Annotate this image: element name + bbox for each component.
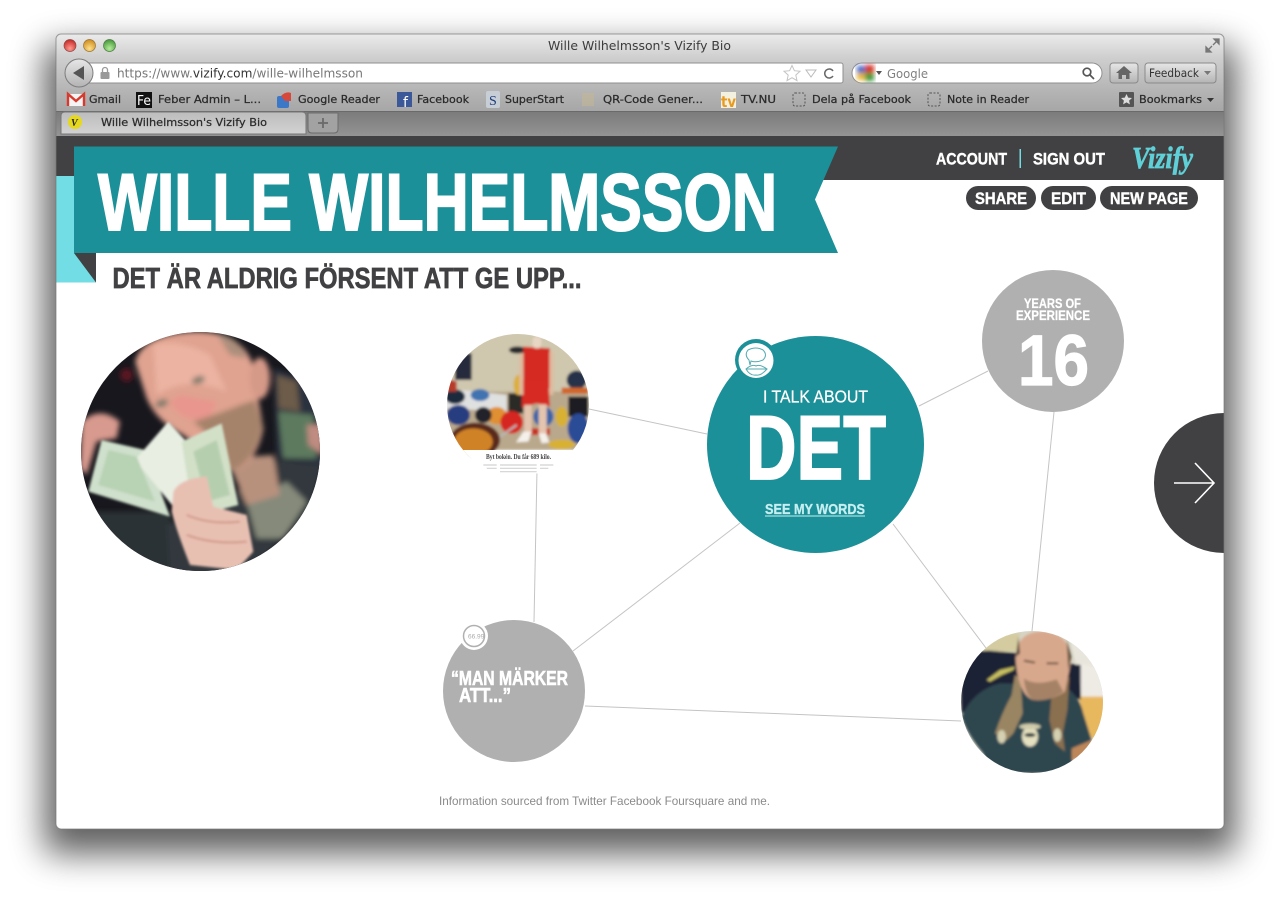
browser chrome	[56, 34, 1224, 136]
action buttons	[966, 186, 1198, 210]
bookmarks bar	[66, 91, 1214, 108]
icon: arrow	[1174, 463, 1214, 503]
account nav	[936, 149, 1106, 168]
icon: magnifier	[1083, 68, 1094, 79]
home button	[1110, 63, 1138, 83]
icon: superstart	[486, 91, 500, 109]
icon: star	[784, 66, 800, 81]
title ribbon accent	[56, 176, 96, 282]
back button	[65, 59, 93, 87]
icon: quote marks: 66.99	[468, 634, 485, 640]
title: WILLE WILHELMSSON	[98, 158, 777, 248]
icon: facebook: f	[403, 95, 409, 111]
topic bubble: DET: DET	[746, 398, 886, 499]
bookmarks bar: Bookmarks	[1139, 93, 1202, 106]
bookmarks bar: TV.NU	[740, 93, 776, 106]
stat bubble: years of experience: YEARS OF	[1024, 296, 1081, 311]
photo caption: Byt bokén. Du får 689 kilo.	[486, 452, 551, 461]
icon: dropdown triangle	[806, 70, 816, 77]
weightlifting photo	[445, 332, 593, 483]
window outline	[56, 34, 1224, 829]
quote bubble	[443, 620, 585, 762]
icon: facebook	[397, 92, 412, 107]
icon: tv.nu: tv	[721, 93, 736, 111]
link: see my words: SEE MY WORDS	[765, 502, 865, 518]
bearded man photo	[960, 630, 1107, 775]
feedback button: Feedback	[1149, 66, 1199, 80]
title ribbon	[74, 146, 838, 253]
address bar: https://www.vizify.com/wille-wilhelmsson	[117, 66, 363, 80]
account nav: ACCOUNT	[936, 150, 1008, 168]
icon: fullscreen arrows	[1206, 39, 1219, 52]
profile photo	[70, 330, 323, 578]
action buttons: EDIT	[1051, 189, 1087, 208]
icon: superstart: S	[489, 94, 497, 109]
new tab button	[308, 113, 338, 133]
address bar	[84, 63, 843, 83]
page background	[56, 180, 1224, 829]
window title: Wille Wilhelmsson's Vizify Bio	[548, 38, 731, 53]
bookmarks bar: Note in Reader	[947, 93, 1029, 106]
bookmarks bar: Dela på Facebook	[812, 93, 912, 106]
bookmarks bar: QR-Code Gener...	[603, 93, 703, 106]
action buttons: NEW PAGE	[1110, 189, 1188, 208]
icon: gmail	[68, 94, 84, 106]
header band	[56, 136, 1224, 180]
feedback button	[1145, 63, 1216, 83]
icon: blank bookmark 2	[928, 93, 940, 106]
icon: quote marks	[460, 622, 488, 650]
icon: speech bubble lips	[735, 339, 777, 381]
bookmarks bar: Facebook	[417, 93, 470, 106]
tagline: DET ÄR ALDRIG FÖRSENT ATT GE UPP...	[112, 263, 582, 295]
stat bubble: years of experience	[982, 270, 1124, 412]
search box	[852, 63, 1102, 83]
icon: feber: Fe	[137, 94, 151, 109]
bookmarks bar: Gmail	[89, 93, 121, 106]
active tab: Wille Wilhelmsson's Vizify Bio	[101, 116, 267, 129]
action buttons: SHARE	[975, 189, 1027, 208]
stat bubble: years of experience: EXPERIENCE	[1016, 308, 1090, 323]
icon: reload	[825, 69, 833, 78]
stat bubble: years of experience: 16	[1018, 322, 1089, 401]
quote bubble: “MAN MÄRKER	[451, 667, 568, 690]
icon: bookmarks star	[1119, 92, 1134, 107]
bookmarks bar: SuperStart	[505, 93, 565, 106]
icon: lock	[100, 68, 110, 79]
footer source note: Information sourced from Twitter Facebook Foursquare and me.	[439, 794, 770, 808]
icon: google	[857, 65, 874, 81]
vizify logo: Vizify	[1132, 140, 1193, 175]
icon: qr code	[582, 93, 594, 106]
bookmarks bar: Feber Admin – L...	[158, 93, 261, 106]
icon: vizify favicon: V	[71, 118, 79, 129]
bookmarks bar: Google Reader	[298, 93, 380, 106]
next arrow button	[1154, 413, 1280, 553]
account nav: SIGN OUT	[1033, 150, 1106, 168]
topic bubble: DET: I TALK ABOUT	[763, 386, 868, 406]
icon: blank bookmark	[793, 93, 805, 106]
icon: vizify favicon	[68, 115, 82, 129]
active tab	[61, 112, 306, 134]
network connecting lines	[534, 371, 1054, 721]
quote bubble: ATT...”	[459, 685, 511, 707]
topic bubble: DET	[707, 336, 924, 553]
traffic lights	[64, 40, 116, 52]
search box: Google	[887, 67, 928, 81]
icon: google reader	[277, 92, 291, 108]
